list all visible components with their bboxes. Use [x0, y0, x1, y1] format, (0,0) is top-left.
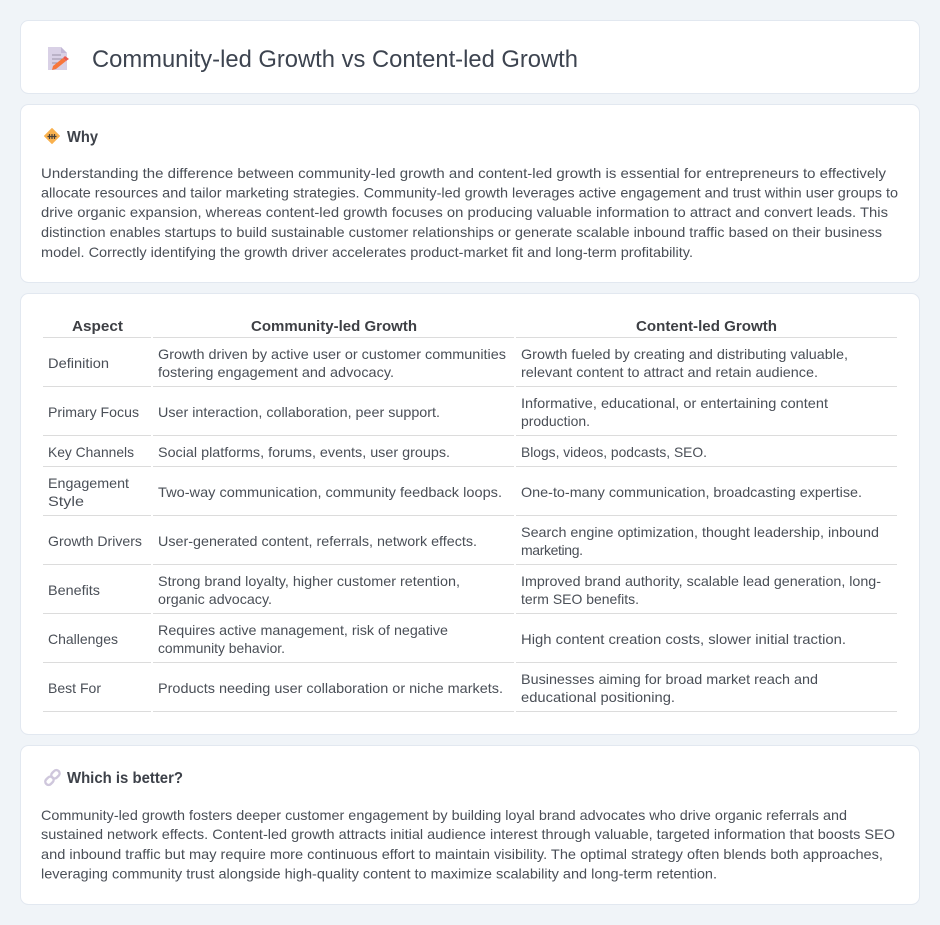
row: benefits: term SEO benefits. — [521, 591, 639, 607]
icon: memo with pencil — [48, 47, 69, 70]
row: key channels — [43, 444, 897, 466]
row: definition: Definition — [48, 355, 109, 371]
row: benefits: Strong brand loyalty, higher customer retention, — [158, 573, 460, 589]
row: benefits: Improved brand authority, scalable lead generation, long- — [521, 573, 881, 589]
row: engagement style: Engagement — [48, 475, 129, 491]
row: growth drivers: Search engine optimization, thought leadership, inbound — [521, 524, 879, 540]
row: primary focus: Primary Focus — [48, 404, 139, 420]
row: primary focus: Informative, educational, or entertaining content — [521, 395, 828, 411]
row: definition: fostering engagement and advocacy. — [158, 364, 394, 380]
panel: which is better — [20, 746, 920, 904]
row: key channels: Social platforms, forums, events, user groups. — [158, 444, 450, 460]
table header row — [43, 319, 897, 338]
row: definition: Growth fueled by creating and distributing valuable, — [521, 346, 848, 362]
row: definition: relevant content to attract and retain audience. — [521, 364, 818, 380]
row: challenges: Requires active management, risk of negative — [158, 622, 448, 638]
row: benefits — [43, 573, 897, 614]
row: engagement style — [43, 475, 897, 516]
icon: link — [44, 769, 61, 786]
row: key channels: Blogs, videos, podcasts, SEO. — [521, 444, 707, 460]
panel: title header — [20, 20, 920, 94]
row: key channels: Key Channels — [48, 444, 134, 460]
row: primary focus — [43, 395, 897, 436]
table header row: Community-led Growth — [251, 319, 417, 335]
heading: which is better: Which is better? — [67, 770, 183, 787]
text block: which paragraph: and inbound traffic but may require more continuous effort to maintain visibility. The optimal strategy often blends both approaches, — [41, 846, 883, 862]
panel: why — [20, 104, 920, 282]
row: best for — [43, 671, 897, 712]
row: best for: educational positioning. — [521, 689, 675, 705]
title: Community-led Growth vs Content-led Growth — [92, 46, 578, 73]
text block: which paragraph: Community-led growth fosters deeper customer engagement by building loyal brand advocates who drive organic referrals and — [41, 807, 847, 823]
text block: why paragraph — [41, 165, 898, 260]
row: definition — [43, 346, 897, 386]
row: best for: Best For — [48, 680, 101, 696]
icon: warning diamond — [44, 128, 60, 144]
text block: which paragraph: leveraging community trust alongside high-quality content to maximize scalability and long-term retention. — [41, 866, 717, 882]
row: challenges: High content creation costs, slower initial traction. — [521, 631, 846, 647]
text block: why paragraph: drive organic expansion, whereas content-led growth focuses on producing valuable information to attract and convert leads. This — [41, 204, 888, 220]
text block: why paragraph: model. Correctly identifying the growth driver accelerates product-market fit and long-term profitability. — [41, 244, 693, 260]
panel: comparison table — [20, 294, 920, 734]
row: challenges — [43, 622, 897, 662]
row: best for: Businesses aiming for broad market reach and — [521, 671, 818, 687]
text block: why paragraph: distinction enables startups to build sustainable customer relationships or generate scalable inbound traffic based on their business — [41, 224, 882, 240]
row: primary focus: production. — [521, 413, 590, 429]
text block: why paragraph: allocate resources and tailor marketing strategies. Community-led growth leverages active engagement and trust within user groups to — [41, 184, 898, 200]
table header row: Content-led Growth — [636, 319, 777, 335]
text block: why paragraph: Understanding the difference between community-led growth and content-led growth is essential for entrepreneurs to effectively — [41, 165, 886, 181]
row: primary focus: User interaction, collaboration, peer support. — [158, 404, 440, 420]
row: growth drivers — [43, 524, 897, 564]
row: definition: Growth driven by active user or customer communities — [158, 346, 506, 362]
text block: which paragraph: sustained network effects. Content-led growth attracts initial audience interest through valuable, targeted information that boosts SEO — [41, 826, 895, 842]
row: benefits: Benefits — [48, 582, 100, 598]
row: benefits: organic advocacy. — [158, 591, 272, 607]
row: engagement style: Two-way communication, community feedback loops. — [158, 484, 502, 500]
row: growth drivers: Growth Drivers — [48, 533, 142, 549]
row: growth drivers: User-generated content, referrals, network effects. — [158, 533, 477, 549]
row: engagement style: One-to-many communication, broadcasting expertise. — [521, 484, 862, 500]
row: engagement style: Style — [48, 493, 84, 509]
row: challenges: community behavior. — [158, 640, 285, 656]
table header row: Aspect — [72, 319, 123, 335]
row: best for: Products needing user collaboration or niche markets. — [158, 680, 503, 696]
heading: why: Why — [67, 129, 98, 146]
text block: which paragraph — [41, 807, 895, 882]
row: challenges: Challenges — [48, 631, 118, 647]
row: growth drivers: marketing. — [521, 542, 583, 558]
